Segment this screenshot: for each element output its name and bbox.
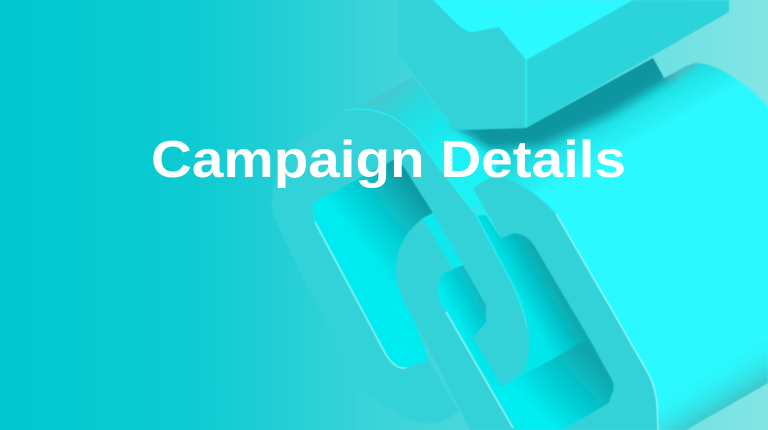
connector strip top: [423, 213, 463, 270]
right link highlight edge: [556, 214, 658, 430]
left link highlight edges: [345, 109, 527, 328]
block right face: [526, 0, 729, 128]
right link extruded body: [450, 58, 768, 430]
block recess: [433, 0, 543, 32]
centre hole: [438, 265, 513, 430]
top block: [398, 0, 729, 130]
middle link face: [396, 218, 515, 430]
title: Campaign Details: [151, 131, 626, 189]
block left face: [398, 0, 526, 130]
left link hole: [312, 160, 433, 368]
block edge highlight: [525, 60, 527, 127]
left link extruded body: [272, 77, 500, 230]
right link lower hole shading: [490, 338, 614, 430]
connector strip bottom: [423, 360, 459, 415]
left link face with hook: [272, 105, 529, 424]
shadow cast by block: [450, 40, 700, 150]
block top strip: [499, 0, 633, 60]
lower diagonal highlight: [446, 312, 513, 428]
3D chain link illustration: [272, 0, 768, 430]
right link inner hole: [446, 215, 589, 430]
right link face: [473, 178, 658, 430]
